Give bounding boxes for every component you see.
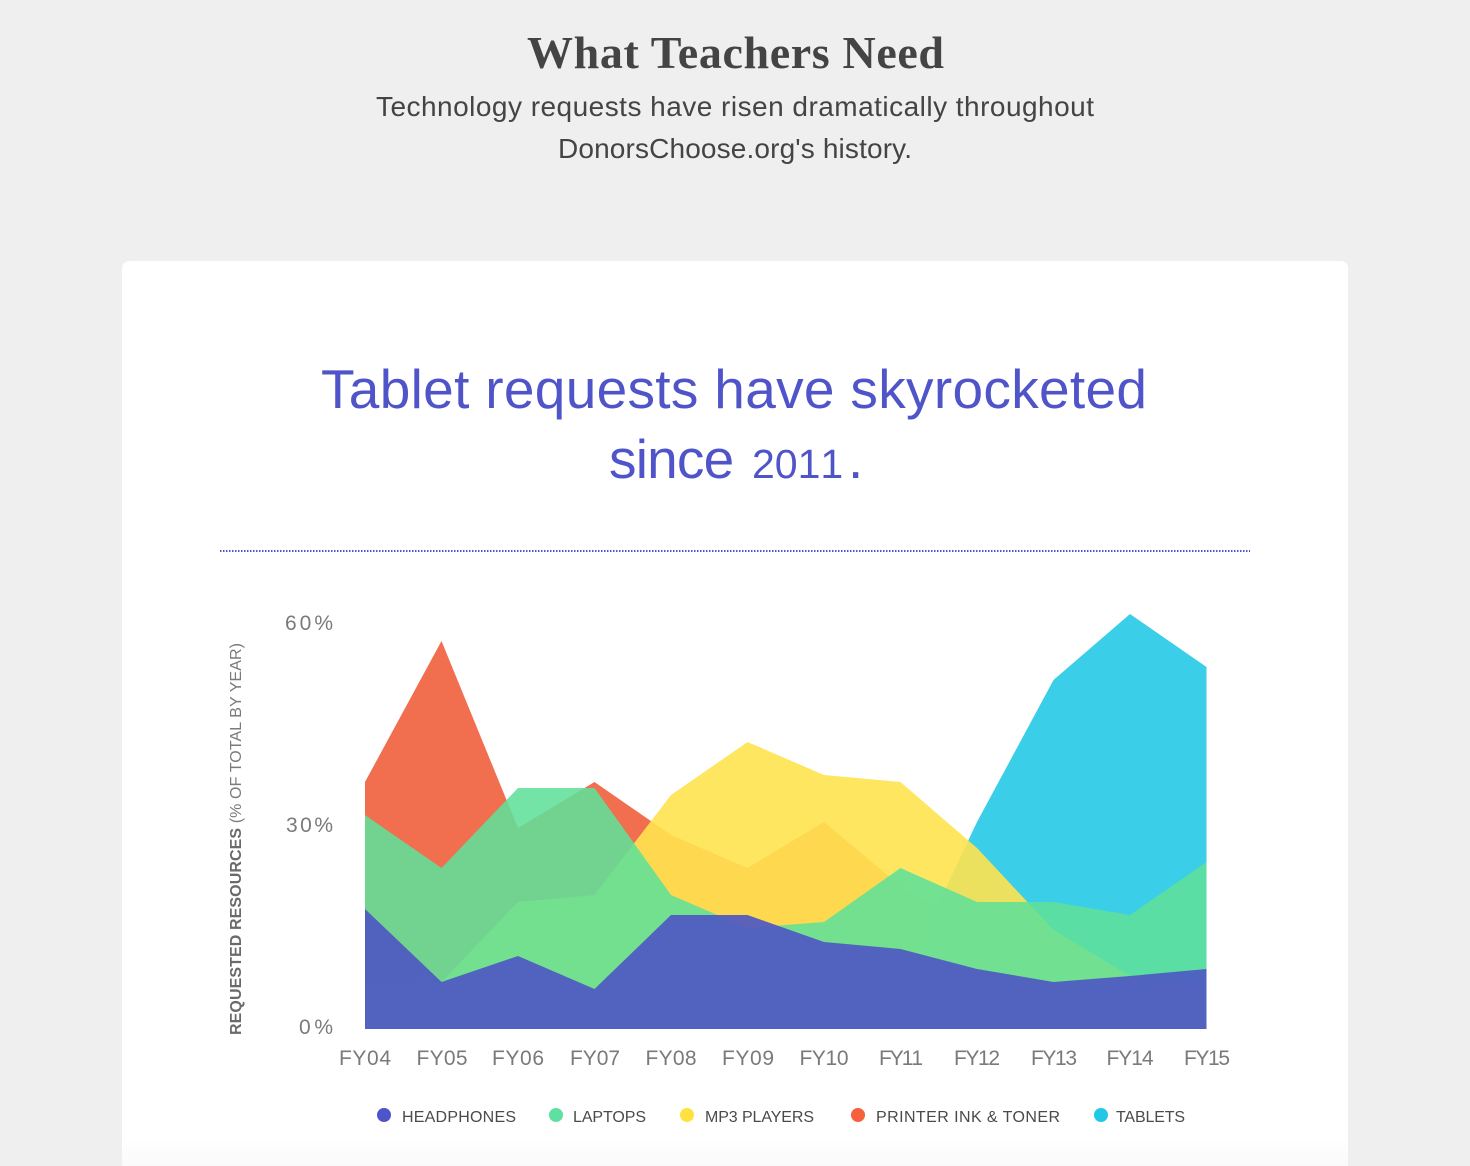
area: headphones [365,909,1206,1029]
x axis labels: FY11 [879,1047,923,1070]
x axis labels: FY14 [1106,1047,1154,1070]
x axis labels: FY10 [800,1047,848,1070]
x axis labels [339,1047,1230,1070]
subtitle: DonorsChoose.org's history. [558,133,912,164]
x axis labels: FY13 [1031,1047,1077,1070]
y axis labels [285,612,333,1039]
subtitle: Technology requests have risen dramatically throughout [376,91,1094,122]
area chart [228,612,1230,1070]
chart heading [321,358,1147,490]
title: What Teachers Need [527,27,944,78]
area: mp3 players [365,742,1206,1029]
x axis labels: FY08 [646,1047,696,1070]
panel: chart card [122,261,1348,1166]
y axis labels: 60% [285,612,333,635]
chart heading: 2011 [752,441,843,487]
subtitle [376,91,1094,164]
chart heading: since [609,428,733,490]
x axis labels: FY15 [1184,1047,1230,1070]
legend item: headphones: HEADPHONES [402,1109,516,1126]
x axis labels: FY07 [570,1047,620,1070]
legend item: mp3 players: MP3 PLAYERS [705,1109,814,1126]
chart heading: . [848,428,863,490]
x axis labels: FY06 [492,1047,544,1070]
legend item: printer ink and toner: PRINTER INK & TONER [876,1109,1060,1126]
y axis labels: 30% [286,814,333,837]
area: laptops [365,788,1206,1029]
x axis labels: FY12 [954,1047,1000,1070]
x axis labels: FY05 [416,1047,468,1070]
legend item: laptops: LAPTOPS [573,1109,646,1126]
x axis labels: FY04 [339,1047,391,1070]
dotted divider [220,550,1250,552]
y axis title: REQUESTED RESOURCES (% OF TOTAL BY YEAR) [228,643,245,1035]
legend [377,1108,1185,1126]
legend item: tablets: TABLETS [1116,1109,1185,1126]
area: printer ink and toner [365,641,1206,1029]
area: tablets [365,614,1206,1029]
y axis labels: 0% [299,1016,333,1039]
x axis labels: FY09 [722,1047,774,1070]
chart heading: Tablet requests have skyrocketed [321,358,1147,420]
